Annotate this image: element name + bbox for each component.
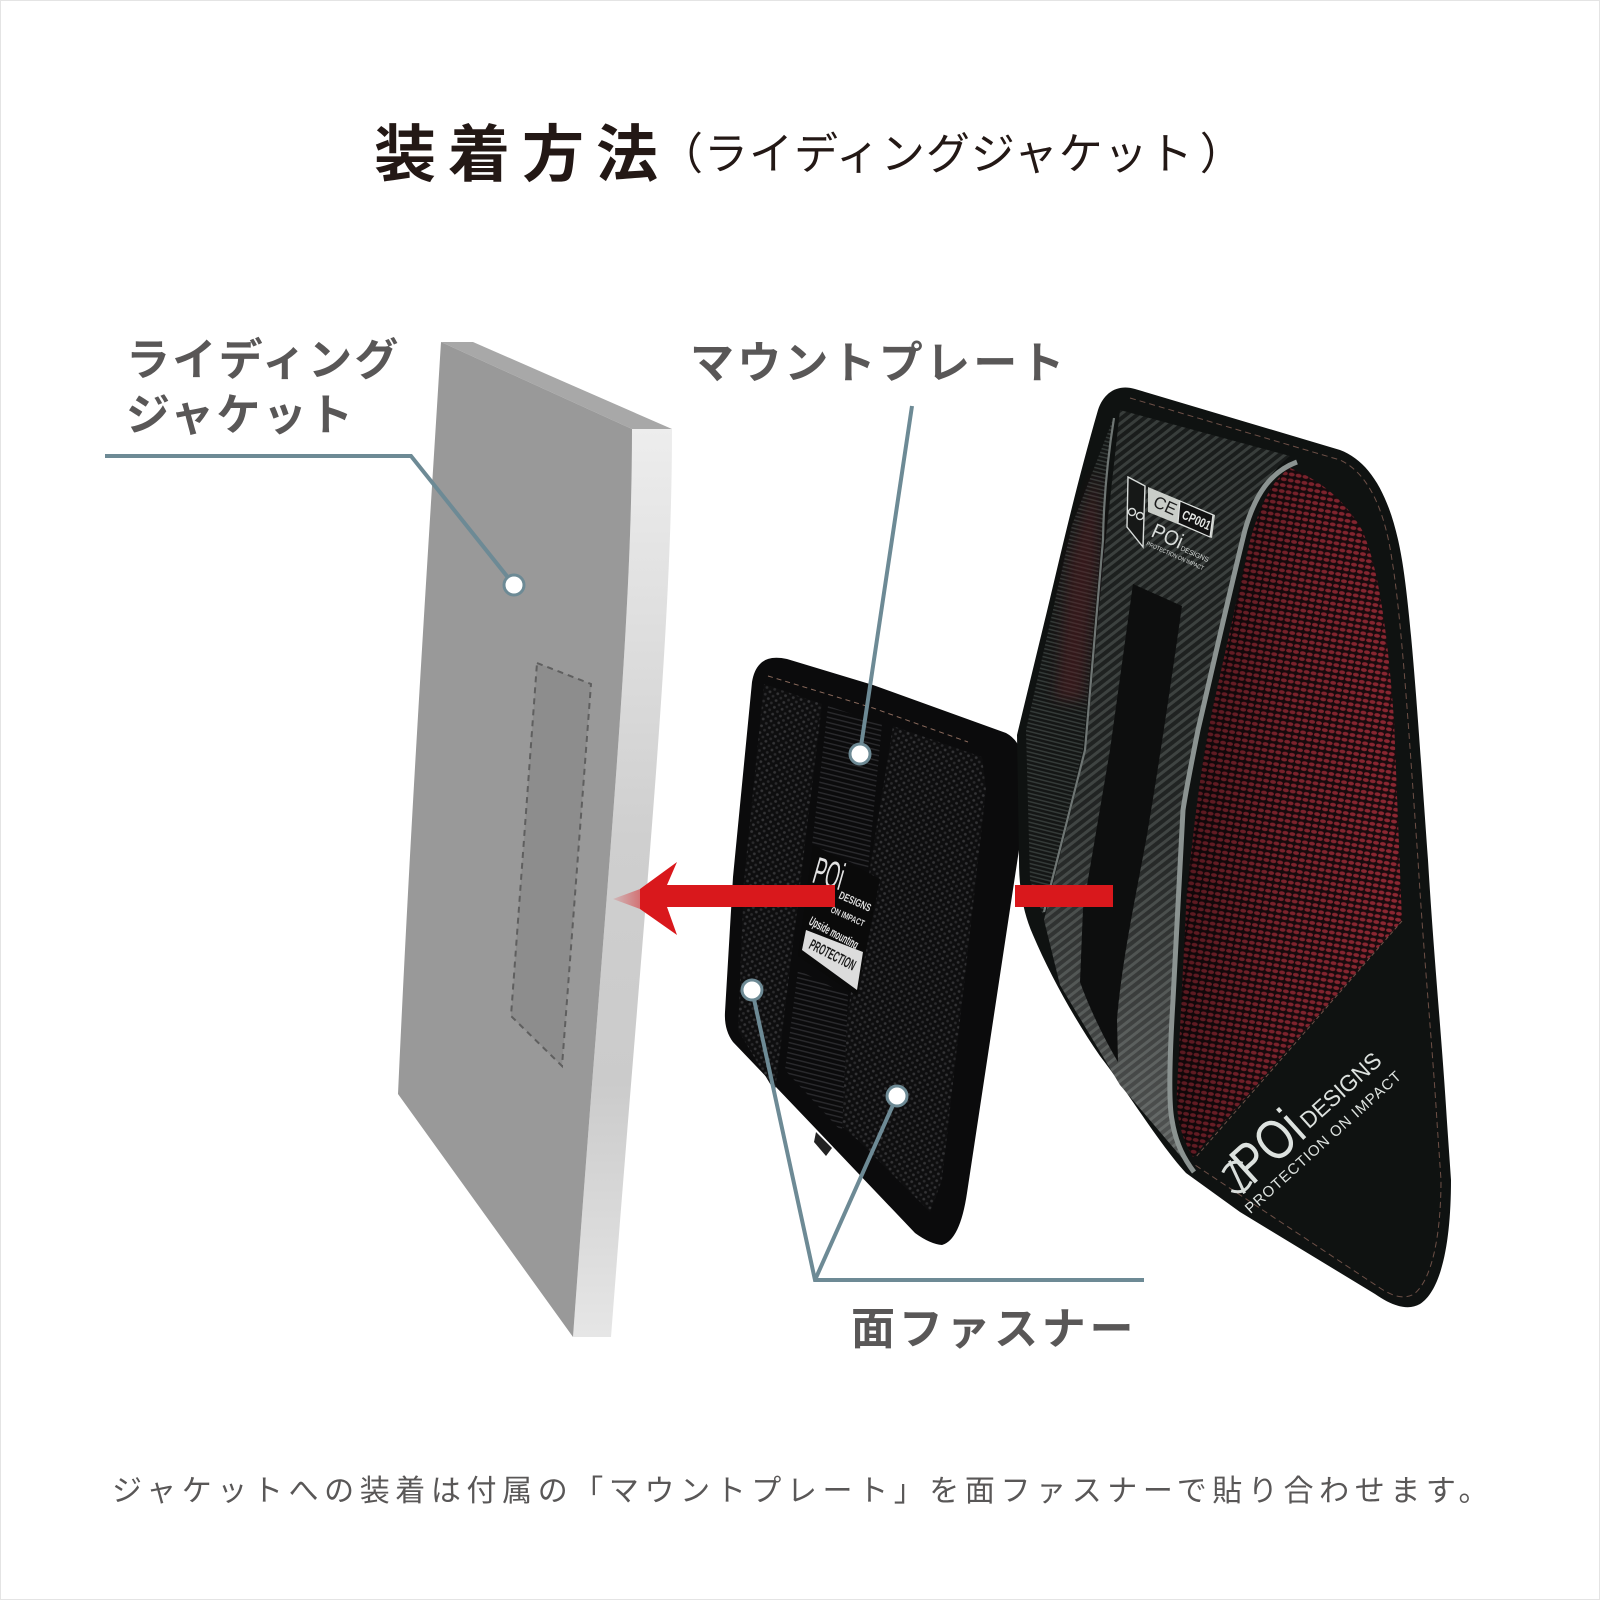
plate upper strip: [812, 706, 882, 870]
title: 装着方法: [374, 121, 670, 190]
callout lines: hook and loop fastener: [742, 980, 1144, 1280]
pad certification label: PROTECTION ON IMPACT: [1145, 541, 1205, 572]
title: [374, 121, 1245, 190]
dashed mounting area: [511, 663, 591, 1066]
pad certification label: DESIGNS: [1179, 545, 1210, 564]
pad large logo: DESIGNS: [1295, 1047, 1386, 1133]
plate mounting text: Upside mounting: [807, 913, 861, 952]
arrow: red fit direction: [613, 862, 1113, 935]
pad thin piping: [1044, 418, 1114, 912]
pad certification label: [1127, 477, 1215, 572]
plate tab: [814, 1132, 832, 1156]
title: （ライディングジャケット）: [659, 130, 1245, 179]
label: hook and loop fastener: 面ファスナー: [851, 1305, 1137, 1354]
label: riding jacket: ジャケット: [126, 391, 355, 440]
plate protection text: PROTECTION: [806, 936, 858, 974]
label: riding jacket: [126, 336, 401, 440]
label: mount plate: マウントプレート: [690, 339, 1068, 388]
jacket side face: [573, 429, 672, 1337]
plate lower strip: [785, 970, 848, 1132]
caption: ジャケットへの装着は付属の「マウントプレート」を面ファスナーで貼り合わせます。: [112, 1475, 1494, 1508]
pad large logo: POi: [1218, 1097, 1317, 1195]
pad carbon highlight: [1044, 410, 1290, 1172]
plate body: [725, 658, 1025, 1245]
pad certification label: CE: [1150, 492, 1180, 519]
plate right hook field: [832, 726, 986, 1212]
label: riding jacket: ライディング: [126, 336, 401, 385]
pad reflective piping: [1170, 462, 1297, 1172]
pad seam stitching: [1195, 921, 1402, 1158]
pad hook strip: [1080, 584, 1182, 1062]
plate label backing: [798, 845, 880, 996]
panel: protector pad photo: [1017, 388, 1451, 1307]
pad left ribbed mesh: [1026, 419, 1113, 915]
pad certification label: POi: [1148, 520, 1187, 554]
panel: mounting plate photo: [725, 658, 1025, 1245]
pad large logo: [1203, 1025, 1405, 1217]
plate logo: POi: [809, 850, 849, 899]
plate left hook field: [738, 684, 822, 1092]
plate stitching: [768, 676, 968, 742]
pad mesh shading: [1177, 468, 1402, 1157]
plate designs text: DESIGNS: [837, 890, 873, 915]
pad edge stitching: [1130, 398, 1441, 1297]
pad outline: [1017, 388, 1451, 1307]
callout line: mount plate: [850, 406, 912, 764]
pad certification label: CP001: [1180, 507, 1213, 533]
pad carbon panel: [1044, 410, 1290, 1172]
pad left reddish tint: [1056, 470, 1098, 700]
pad red mesh: [1177, 468, 1402, 1157]
plate protection box: [802, 930, 863, 990]
jacket top face: [441, 342, 672, 429]
panel: riding jacket board: [398, 342, 672, 1337]
callout line: riding jacket: [105, 456, 524, 595]
jacket front face: [398, 342, 632, 1337]
plate impact text: ON IMPACT: [829, 905, 866, 929]
pad large logo: PROTECTION ON IMPACT: [1242, 1068, 1405, 1217]
pad anchor mark: [1219, 1156, 1255, 1198]
